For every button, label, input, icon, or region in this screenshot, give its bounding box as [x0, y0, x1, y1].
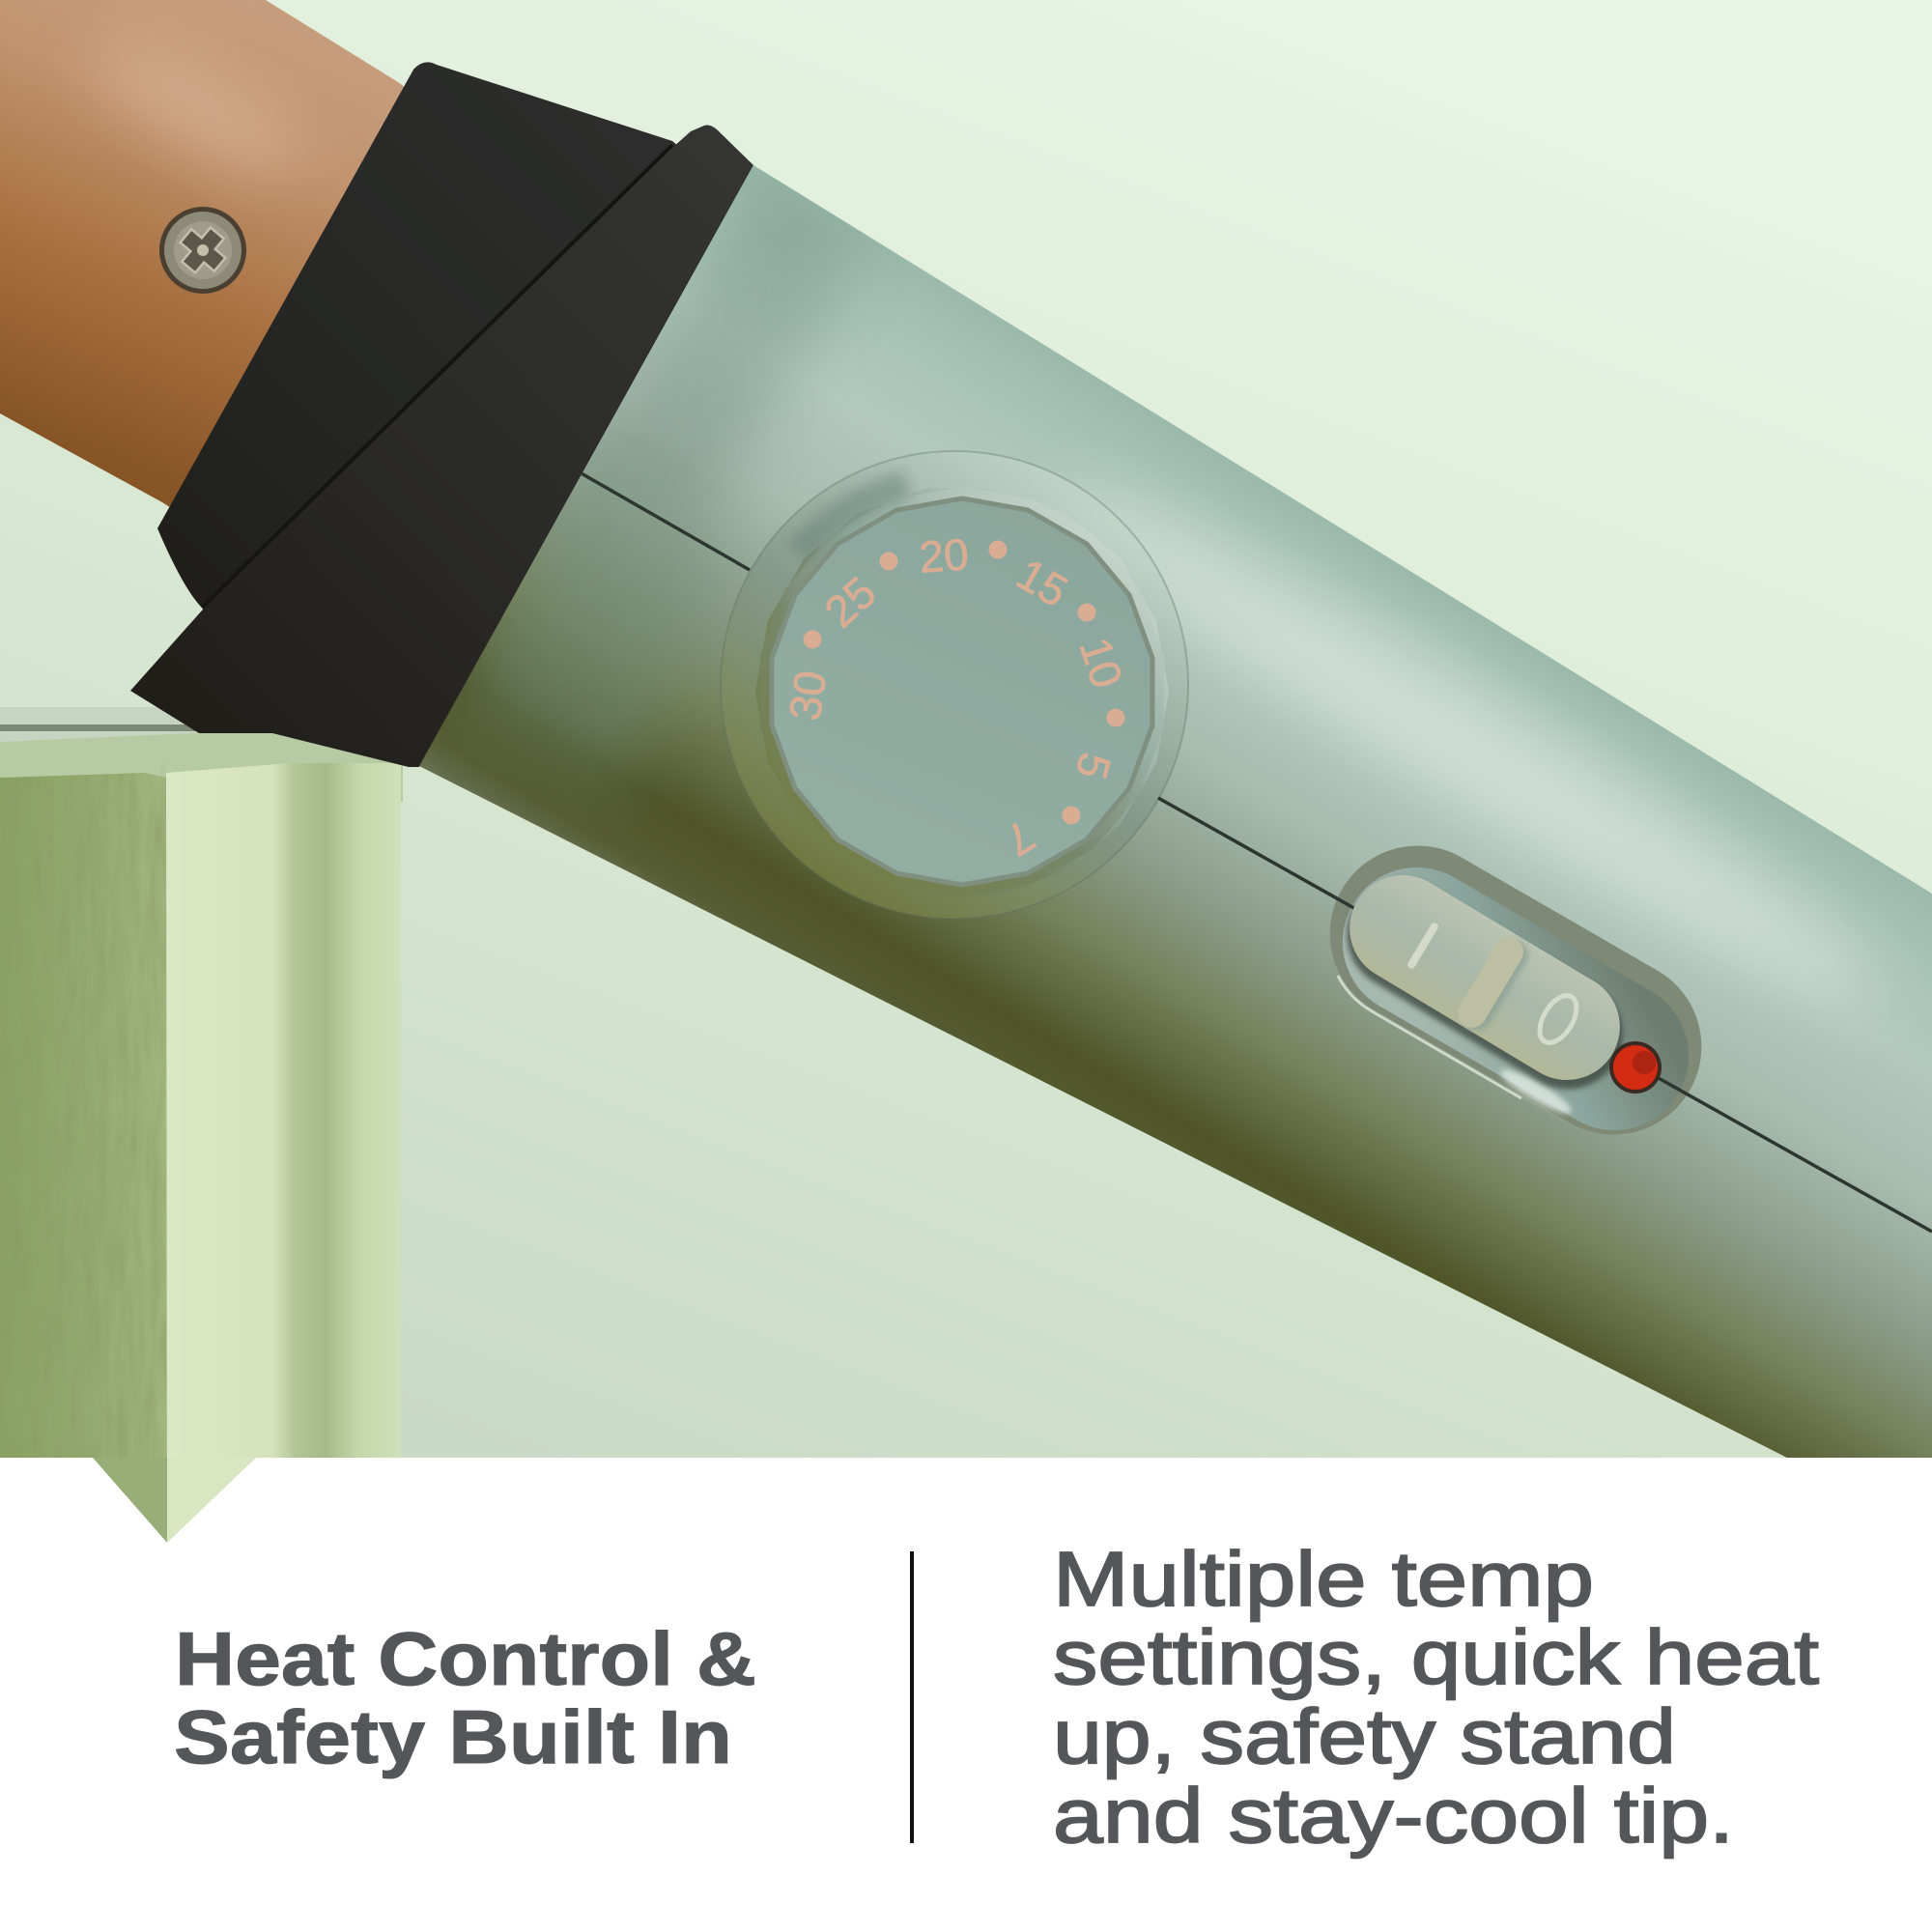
- dial scale labels: 10: [1069, 632, 1133, 694]
- knob facets: [760, 487, 1164, 896]
- black collar front piece: [130, 126, 753, 767]
- description: up, safety stand: [1053, 1693, 1676, 1779]
- collar overlap shadow: [202, 145, 672, 608]
- switch recess: [1316, 840, 1716, 1157]
- slider ridge: [1452, 932, 1529, 1033]
- block front face with pointer: [0, 773, 167, 1543]
- knob top-left shadow: [798, 485, 907, 554]
- photo background: [0, 0, 1932, 1459]
- description: Multiple temp: [1053, 1536, 1594, 1622]
- pointer notch right: [167, 1458, 256, 1543]
- dial scale labels: 20: [918, 528, 970, 582]
- dial scale labels: 5: [1066, 748, 1121, 784]
- handle lower-left green tint: [456, 501, 709, 794]
- handle highlight: [1081, 481, 1874, 1005]
- knob outer teeth: [725, 453, 1199, 930]
- knob face: [772, 498, 1152, 885]
- black collar back piece: [157, 62, 734, 657]
- slider ridge shadow: [1457, 935, 1534, 1036]
- description: and stay-cool tip.: [1053, 1773, 1734, 1859]
- handle left shade: [587, 178, 862, 522]
- seam through switch left: [1158, 798, 1359, 911]
- off mark: [1532, 989, 1584, 1049]
- barrel highlight: [78, 14, 318, 198]
- handle seam line left: [573, 469, 750, 570]
- dial scale labels: 15: [1009, 549, 1076, 616]
- divider: [910, 1551, 914, 1843]
- dial scale labels: 25: [815, 567, 885, 637]
- power switch: [1158, 798, 1932, 1232]
- dial outer ring: [721, 451, 1188, 919]
- temperature dial: [721, 451, 1199, 930]
- dial scale labels: 7: [996, 810, 1044, 867]
- curling iron barrel: [0, 0, 444, 541]
- heading: Safety Built In: [174, 1694, 732, 1779]
- heading: Heat Control &: [175, 1616, 756, 1701]
- on mark: [1406, 922, 1439, 970]
- block side face with pointer: [166, 763, 401, 1543]
- description: settings, quick heat: [1053, 1614, 1819, 1700]
- pointer notch left: [93, 1458, 167, 1543]
- stand block: [0, 707, 403, 1458]
- switch recess rim: [1297, 813, 1734, 1167]
- switch lower lip: [1338, 976, 1521, 1098]
- seam through switch right: [1657, 1077, 1932, 1232]
- switch shadow: [1326, 859, 1643, 1110]
- barrel screw: [159, 207, 246, 294]
- dial scale labels: [780, 528, 1133, 867]
- handle body: [419, 165, 1932, 1458]
- dial scale labels: 30: [780, 668, 836, 724]
- dial dots: [804, 541, 1124, 825]
- block top face: [0, 707, 232, 746]
- white caption panel: [0, 1458, 1932, 1932]
- recess glint: [1496, 1064, 1576, 1120]
- switch button: [1330, 856, 1639, 1099]
- block light top band: [0, 729, 403, 802]
- indicator light: [1609, 1041, 1662, 1094]
